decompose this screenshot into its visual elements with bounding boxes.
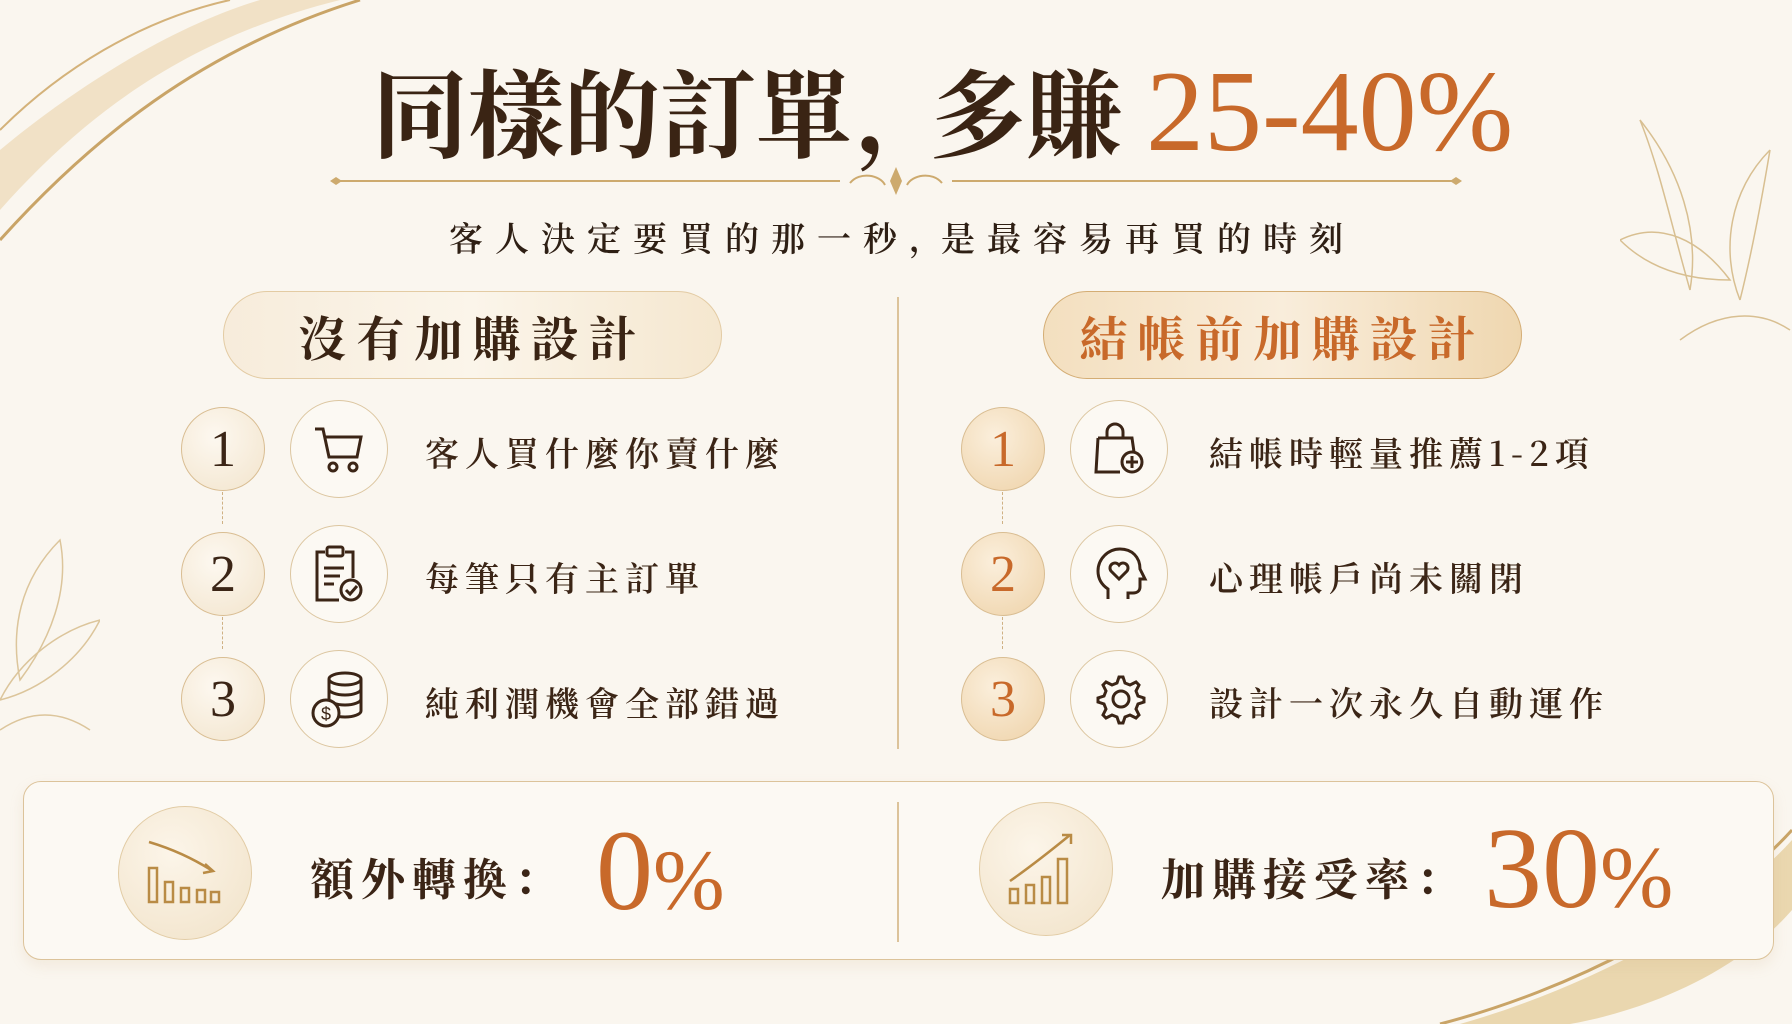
- icon: cart: [290, 400, 388, 498]
- subtitle: 客人決定要買的那一秒，是最容易再買的時刻: [449, 212, 1355, 261]
- stat: left: [118, 806, 725, 940]
- row 1: [961, 400, 1595, 498]
- row 3: 3: [990, 670, 1016, 728]
- icon: clipboard: [290, 525, 388, 623]
- row 3: [961, 650, 1609, 748]
- label: 加購接受率：: [1161, 844, 1467, 908]
- panel: right header pill: 結帳前加購設計: [1079, 300, 1486, 370]
- value 0%: 0%: [596, 807, 725, 934]
- row 2: 每筆只有主訂單: [425, 552, 705, 601]
- row 3: 純利潤機會全部錯過: [425, 677, 785, 726]
- title: 同樣的訂單，多賺 25-40%: [372, 41, 1513, 178]
- label: 額外轉換：: [310, 844, 565, 908]
- value 30%: 30%: [1484, 805, 1673, 933]
- row 2: [961, 525, 1529, 623]
- row 2: 心理帳戶尚未關閉: [1209, 552, 1529, 601]
- panel: right list: [961, 400, 1609, 748]
- row 2: 2: [210, 546, 236, 602]
- icon: declining chart: [118, 806, 252, 940]
- decorative leaves left: [0, 538, 100, 730]
- row 3: 設計一次永久自動運作: [1209, 677, 1609, 726]
- icon: shopping bag plus: [1070, 400, 1168, 498]
- icon: coins: [290, 650, 388, 748]
- row 1: [181, 400, 785, 498]
- row 1: 1: [210, 420, 236, 478]
- stat: right: [979, 802, 1673, 936]
- row 2: [181, 525, 705, 623]
- icon: gear: [1070, 650, 1168, 748]
- row 3: 3: [210, 670, 236, 728]
- panel: right header pill: [1043, 291, 1522, 379]
- center divider: [897, 297, 898, 749]
- row 1: 結帳時輕量推薦1-2項: [1209, 427, 1595, 476]
- icon: rising chart: [979, 802, 1113, 936]
- panel: left list: [181, 400, 785, 748]
- decorative gold swirl top-left: [0, 0, 360, 241]
- panel: left header pill: 沒有加購設計: [298, 300, 646, 370]
- row 3: [181, 650, 785, 748]
- icon: coins: $: [321, 704, 331, 724]
- row 1: 1: [990, 420, 1016, 478]
- decorative gold swirl bottom-right: [1440, 829, 1792, 1024]
- row 1: 客人買什麼你賣什麼: [425, 427, 785, 476]
- panel: bottom summary: [23, 781, 1774, 960]
- panel: left header pill: [223, 291, 722, 379]
- ornamental divider: [330, 167, 1462, 195]
- icon: head heart: [1070, 525, 1168, 623]
- decorative leaves right: [1620, 120, 1790, 340]
- row 2: 2: [990, 546, 1016, 602]
